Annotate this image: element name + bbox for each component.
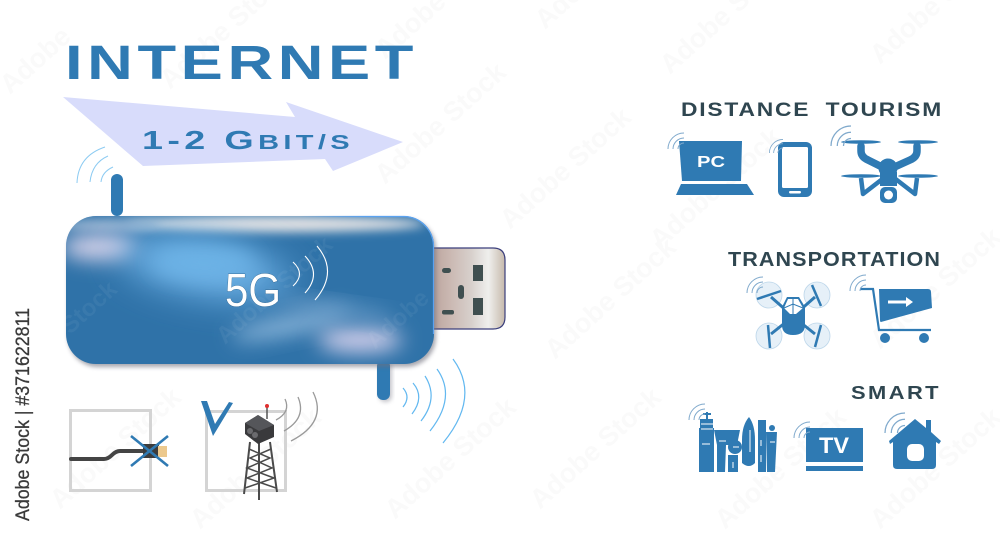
watermark pattern: Adobe Stock: [369, 56, 512, 189]
left lilac glow: [62, 234, 138, 260]
5G waves: [293, 246, 328, 300]
central light-blue glow: [117, 228, 293, 308]
top antenna with signal: [77, 147, 123, 216]
USB plug: [430, 248, 505, 329]
cable box crossed out: [70, 410, 168, 490]
stock id label: Adobe Stock | #371622811: [13, 308, 34, 521]
top sheen: [125, 216, 425, 232]
device watermark: [66, 238, 428, 344]
watermark pattern: Adobe Stock: [644, 121, 787, 254]
device watermark: Adobe: [361, 284, 435, 354]
tower signal: [276, 392, 317, 441]
speed label: 1-2 G BIT/S: [142, 125, 354, 155]
device watermark: Stock: [56, 275, 123, 339]
icon: phone: [769, 139, 812, 197]
speed arrow: [63, 97, 403, 171]
heading: smart: SMART: [851, 383, 941, 403]
watermark pattern: Adobe Stock: [494, 101, 637, 234]
lower streak: [229, 304, 351, 346]
tower box with check mark: [201, 392, 317, 500]
icon: smart city: [689, 404, 777, 472]
watermark pattern: Adobe Stock: [709, 401, 852, 534]
bottom antenna: [377, 360, 392, 402]
check mark: [201, 401, 233, 436]
icon: smart tv: [794, 422, 863, 471]
icon: passenger drone: [747, 277, 830, 349]
watermark pattern: Adobe Stock: [44, 381, 187, 514]
watermark pattern: Adobe Stock: [539, 231, 682, 364]
title: INTERNET: [65, 37, 418, 90]
5G modem body: [56, 216, 436, 367]
tower: [244, 442, 277, 500]
heading: distance tourism: DISTANCE TOURISM: [681, 100, 943, 121]
icon: laptop: PC: [697, 154, 726, 171]
tower head: [245, 415, 274, 444]
icon: smart tv: TV: [819, 433, 849, 458]
watermark pattern: Adobe Stock: [379, 391, 522, 524]
heading: transportation: TRANSPORTATION: [728, 249, 941, 271]
watermark pattern: Adobe Stock: [184, 401, 327, 534]
bottom antenna signal waves: [403, 359, 465, 443]
icon: shopping cart: [850, 275, 932, 343]
icon: smart home: [885, 413, 941, 469]
icon: camera drone: [831, 126, 938, 203]
lower-right lilac glow: [318, 328, 402, 352]
device watermark: Adobe Stock: [211, 231, 339, 349]
icon: laptop: [668, 133, 754, 195]
5G label: 5G: [225, 264, 281, 316]
watermark pattern: Adobe Stock: [524, 381, 667, 514]
